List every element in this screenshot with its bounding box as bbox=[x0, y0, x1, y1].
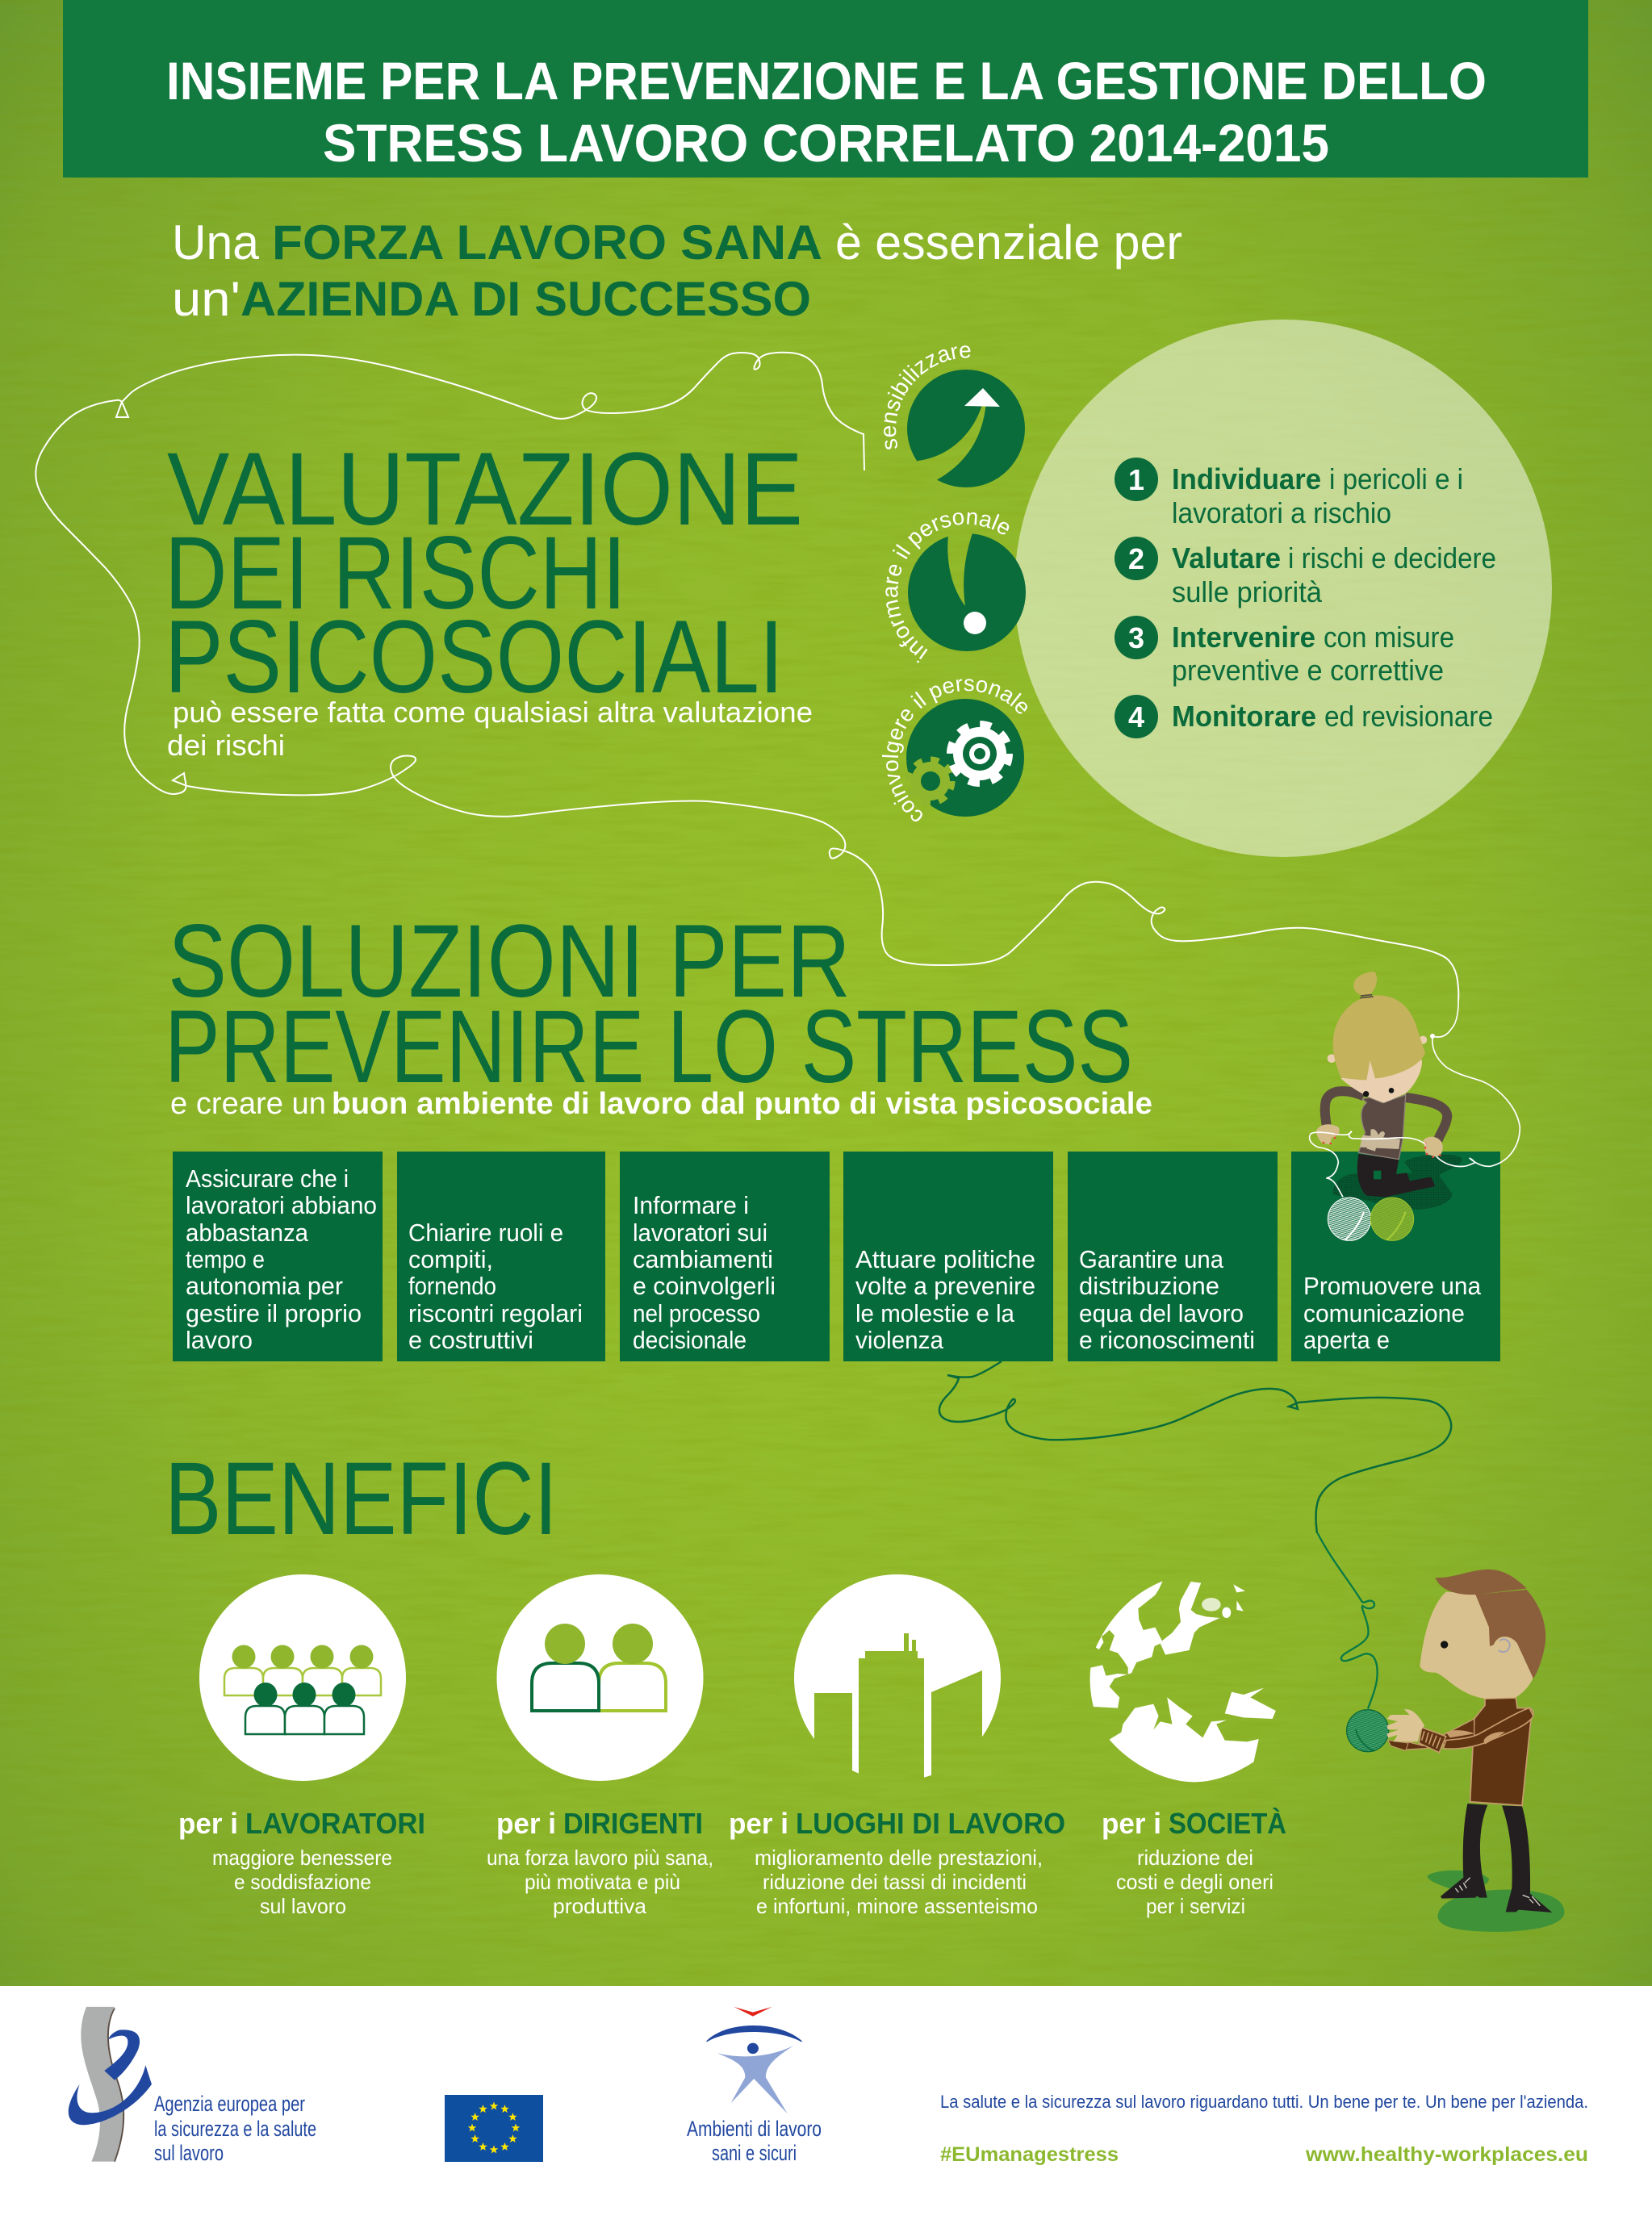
icon: europe globe bbox=[1090, 1581, 1276, 1782]
panel: box 3: lavoratori sui bbox=[633, 1219, 767, 1247]
benefit: società: costi e degli oneri bbox=[1116, 1870, 1274, 1894]
step 1: 1 bbox=[1128, 463, 1144, 496]
benefit: società bbox=[1102, 1807, 1286, 1918]
website: www.healthy-workplaces.eu bbox=[1305, 2143, 1588, 2166]
benefit: società: per i bbox=[1102, 1807, 1161, 1840]
logo: healthy workplaces campaign: Ambienti di lavoro bbox=[687, 2117, 822, 2141]
header band with title: INSIEME PER LA PREVENZIONE E LA GESTIONE DELLO bbox=[166, 51, 1487, 111]
panel: box 1: lavoratori abbiano bbox=[186, 1191, 377, 1219]
panel: box 2: e costruttivi bbox=[408, 1326, 533, 1354]
step 2: i rischi e decidere bbox=[1288, 541, 1496, 575]
step 3 bbox=[1115, 616, 1454, 687]
benefit: lavoratori: LAVORATORI bbox=[245, 1807, 425, 1840]
panel: box 3 bbox=[620, 1152, 830, 1361]
header band with title bbox=[63, 0, 1588, 178]
step 4 bbox=[1115, 695, 1493, 738]
panel: box 4: volte a prevenire bbox=[855, 1272, 1035, 1300]
benefit: luoghi di lavoro: LUOGHI DI LAVORO bbox=[796, 1807, 1065, 1840]
panel: four steps circle bbox=[1014, 320, 1552, 857]
subheading: e creare un bbox=[170, 1087, 326, 1121]
panel: box 5: Garantire una bbox=[1079, 1245, 1224, 1273]
step 4: Monitorare bbox=[1172, 700, 1316, 733]
heading: valutazione dei rischi psicosociali: PSICOSOCIALI bbox=[165, 600, 784, 715]
panel: box 4: Attuare politiche bbox=[855, 1245, 1035, 1273]
logo: healthy workplaces campaign: sani e sicuri bbox=[712, 2141, 797, 2165]
panel: box 2: compiti, bbox=[408, 1245, 493, 1273]
panel: box 1: abbastanza bbox=[186, 1219, 309, 1247]
step 4: ed revisionare bbox=[1324, 700, 1493, 733]
benefit: società: SOCIETÀ bbox=[1169, 1807, 1286, 1840]
subtitle bbox=[172, 215, 1182, 326]
intro text: può essere fatta come qualsiasi altra valutazione bbox=[173, 696, 813, 729]
logo: EU-OSHA agency: la sicurezza e la salute bbox=[154, 2117, 316, 2141]
step 1: lavoratori a rischio bbox=[1172, 496, 1391, 529]
panel: box 1: tempo e bbox=[186, 1245, 265, 1273]
panel: box 5 bbox=[1068, 1152, 1278, 1361]
benefit: luoghi di lavoro: per i bbox=[729, 1807, 788, 1840]
tagline: La salute e la sicurezza sul lavoro riguardano tutti. Un bene per te. Un bene per l'azienda. bbox=[940, 2092, 1588, 2112]
benefit: lavoratori: sul lavoro bbox=[260, 1894, 346, 1918]
panel: box 6: Promuovere una bbox=[1303, 1272, 1482, 1300]
panel: box 1: lavoro bbox=[186, 1326, 253, 1354]
benefit: dirigenti: DIRIGENTI bbox=[563, 1807, 703, 1840]
step 1: Individuare bbox=[1172, 462, 1321, 495]
hashtag: #EUmanagestress bbox=[940, 2143, 1119, 2166]
yarn balls bbox=[1328, 1198, 1414, 1240]
icon: workplaces skyline bbox=[794, 1574, 1001, 1781]
benefit: dirigenti: produttiva bbox=[553, 1894, 647, 1918]
step 4: 4 bbox=[1128, 700, 1144, 734]
benefit: luoghi di lavoro bbox=[729, 1807, 1065, 1918]
benefit: dirigenti bbox=[487, 1807, 713, 1918]
benefit: società: riduzione dei bbox=[1137, 1846, 1253, 1870]
heading: valutazione dei rischi psicosociali: DEI RISCHI bbox=[165, 516, 626, 631]
benefit: lavoratori: maggiore benessere bbox=[212, 1846, 392, 1870]
panel: box 3: Informare i bbox=[633, 1191, 749, 1219]
logo: EU flag bbox=[445, 2095, 543, 2162]
step 2 bbox=[1115, 537, 1496, 608]
icon: sensibilizzare arrow: sensibilizzare bbox=[884, 345, 970, 449]
logo: EU-OSHA agency bbox=[69, 2007, 316, 2165]
dark green thread below the boxes bbox=[939, 1361, 1451, 1533]
panel: box 1: Assicurare che i bbox=[186, 1164, 349, 1193]
panel: box 1: autonomia per bbox=[186, 1272, 343, 1300]
subtitle: è essenziale per bbox=[835, 215, 1182, 270]
panel: box 1: gestire il proprio bbox=[186, 1299, 362, 1327]
heading: benefici: BENEFICI bbox=[165, 1441, 558, 1557]
panel: box 3: decisionale bbox=[633, 1326, 747, 1354]
panel: box 4: violenza bbox=[855, 1326, 944, 1354]
benefit: dirigenti: più motivata e più bbox=[525, 1870, 680, 1894]
panel: box 3: e coinvolgerli bbox=[633, 1272, 776, 1300]
heading: soluzioni per prevenire lo stress: PREVENIRE LO STRESS bbox=[165, 989, 1133, 1105]
white thread across the page bbox=[36, 353, 1458, 1001]
icon: sensibilizzare arrow bbox=[884, 345, 1025, 487]
panel: box 4 bbox=[843, 1152, 1053, 1361]
benefit: lavoratori: per i bbox=[178, 1807, 238, 1840]
yarn ball and thread bbox=[1318, 1533, 1389, 1752]
benefit: luoghi di lavoro: miglioramento delle prestazioni, bbox=[755, 1846, 1043, 1870]
panel: box 4: le molestie e la bbox=[855, 1299, 1015, 1327]
intro text bbox=[167, 696, 813, 762]
benefit: dirigenti: una forza lavoro più sana, bbox=[487, 1846, 713, 1870]
benefit: lavoratori: e soddisfazione bbox=[234, 1870, 371, 1894]
panel: box 3: nel processo bbox=[633, 1299, 760, 1327]
icon: coinvolgere il personale gears: coinvolgere il personale bbox=[881, 679, 1027, 821]
footer bbox=[0, 1986, 1652, 2224]
heading: valutazione dei rischi psicosociali bbox=[165, 432, 803, 715]
panel: box 2: Chiarire ruoli e bbox=[408, 1219, 563, 1247]
step 2: sulle priorità bbox=[1172, 575, 1323, 608]
panel: box 5: e riconoscimenti bbox=[1079, 1326, 1255, 1354]
icon: informare il personale exclamation: informare il personale bbox=[885, 512, 1009, 663]
step 3: con misure bbox=[1324, 621, 1454, 654]
subtitle: Una bbox=[172, 215, 260, 270]
step 3: 3 bbox=[1128, 621, 1144, 654]
benefit: lavoratori bbox=[178, 1807, 425, 1918]
logo: EU-OSHA agency: sul lavoro bbox=[154, 2141, 224, 2165]
subtitle: FORZA LAVORO SANA bbox=[272, 215, 822, 270]
intro text: dei rischi bbox=[167, 729, 285, 762]
panel: box 5: distribuzione bbox=[1079, 1272, 1219, 1300]
step 3: Intervenire bbox=[1172, 621, 1315, 654]
panel: box 5: equa del lavoro bbox=[1079, 1299, 1244, 1327]
panel: box 3: cambiamenti bbox=[633, 1245, 773, 1273]
illustration: man holding yarn bbox=[1318, 1533, 1564, 1932]
panel: box 2: riscontri regolari bbox=[408, 1299, 583, 1327]
logo: EU-OSHA agency: Agenzia europea per bbox=[154, 2092, 305, 2116]
subtitle: un' bbox=[172, 272, 240, 326]
benefit: società: per i servizi bbox=[1146, 1894, 1245, 1918]
heading: soluzioni per prevenire lo stress: SOLUZIONI PER bbox=[168, 904, 851, 1019]
panel: box 2: fornendo bbox=[408, 1272, 496, 1300]
subtitle: AZIENDA DI SUCCESSO bbox=[240, 272, 811, 326]
heading: valutazione dei rischi psicosociali: VALUTAZIONE bbox=[167, 432, 803, 547]
header band with title: STRESS LAVORO CORRELATO 2014-2015 bbox=[323, 113, 1329, 173]
benefit: luoghi di lavoro: riduzione dei tassi di incidenti bbox=[763, 1870, 1027, 1894]
step 2: 2 bbox=[1128, 542, 1144, 575]
benefit: dirigenti: per i bbox=[496, 1807, 556, 1840]
benefit: luoghi di lavoro: e infortuni, minore assenteismo bbox=[756, 1894, 1038, 1918]
illustration: woman knitting bbox=[1310, 972, 1520, 1240]
step 1 bbox=[1115, 458, 1463, 529]
step 3: preventive e correttive bbox=[1172, 654, 1444, 687]
panel: box 2 bbox=[397, 1152, 605, 1361]
panel: box 6 bbox=[1291, 1152, 1500, 1361]
heading: soluzioni per prevenire lo stress bbox=[165, 904, 1133, 1105]
logo: healthy workplaces campaign bbox=[687, 2007, 822, 2165]
subheading: buon ambiente di lavoro dal punto di vista psicosociale bbox=[332, 1087, 1152, 1121]
icon: managers bbox=[497, 1574, 704, 1781]
panel: box 6: comunicazione bbox=[1303, 1299, 1465, 1327]
panel: box 1 bbox=[173, 1152, 383, 1361]
icon: workers bbox=[199, 1574, 406, 1781]
step 1: i pericoli e i bbox=[1329, 462, 1463, 495]
step 2: Valutare bbox=[1172, 541, 1281, 575]
thread through the hands bbox=[1310, 1001, 1520, 1197]
panel: box 6: aperta e bbox=[1303, 1326, 1390, 1354]
